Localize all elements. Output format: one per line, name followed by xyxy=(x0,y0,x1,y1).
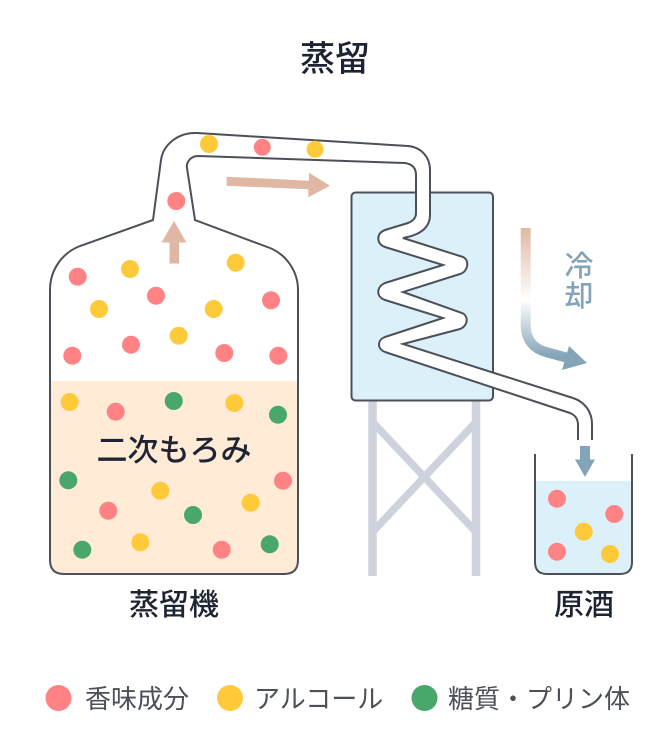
panel: still pot xyxy=(50,133,592,574)
legend: 香味成分 xyxy=(85,684,189,714)
legend: アルコール xyxy=(254,684,383,714)
label: cooling: 却 xyxy=(564,280,594,313)
mash liquid xyxy=(51,381,297,573)
particles in still xyxy=(59,135,324,559)
label: raw spirit: 原酒 xyxy=(554,589,614,622)
still outline xyxy=(153,133,592,440)
condenser tank xyxy=(352,192,493,400)
arrow: vapour rising xyxy=(162,221,186,264)
still stand legs xyxy=(372,400,476,576)
arrow: cooling xyxy=(526,228,587,370)
label: cooling: 冷 xyxy=(564,250,594,283)
legend xyxy=(46,684,630,714)
arrow: vapour moving right xyxy=(227,173,330,197)
legend: 糖質・プリン体 xyxy=(448,684,630,714)
beaker liquid xyxy=(536,481,631,573)
label: cooling xyxy=(564,250,594,313)
beaker outline xyxy=(535,454,632,574)
arrow: drip xyxy=(575,446,595,477)
label: mash: 二次もろみ xyxy=(96,433,252,468)
label: still: 蒸留機 xyxy=(129,589,219,622)
particles in beaker xyxy=(548,490,623,563)
title: 蒸留 xyxy=(300,40,370,79)
panel: receiving beaker xyxy=(535,446,632,574)
